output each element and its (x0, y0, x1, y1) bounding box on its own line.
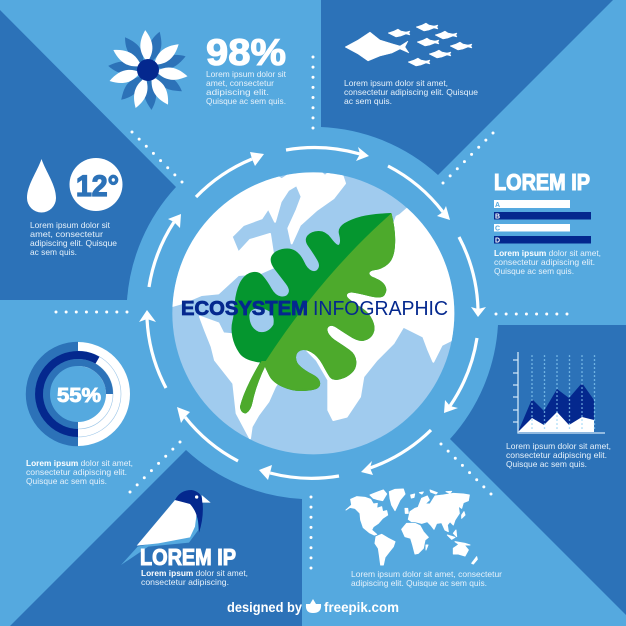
footer credit: designed by (227, 599, 302, 615)
text block: donut: Quisque ac sem quis. (26, 476, 107, 486)
text block: water (30, 220, 117, 257)
land: south america (199, 316, 278, 440)
text block: donut (26, 458, 133, 486)
text block: water: ac sem quis. (30, 247, 77, 257)
leaf (232, 214, 394, 412)
text block: area chart: Quisque ac sem quis. (506, 459, 587, 469)
text block: fish: ac sem quis. (344, 96, 392, 106)
panel: bird, bottom (10, 450, 302, 626)
stat: 98%: 98% (206, 32, 286, 73)
text block: water: amet, consectetur (30, 229, 103, 239)
land: east (303, 203, 460, 420)
bar chart (494, 200, 591, 244)
text block: flower: adipiscing elit. (206, 87, 269, 97)
text block: bars (494, 248, 601, 276)
circular arrows (139, 147, 486, 480)
land: north west (172, 172, 346, 307)
title: ECOSYSTEM (181, 298, 308, 320)
panel: area chart, right (450, 325, 626, 615)
bar chart: C (495, 226, 500, 232)
text block: bird: Lorem ipsum dolor sit amet, (141, 568, 248, 578)
icon: bird (121, 490, 211, 565)
bar chart: D (495, 238, 500, 244)
donut chart: 55% (57, 385, 101, 407)
text block: bars: Lorem ipsum dolor sit amet, (494, 248, 601, 258)
heading: lorem ip, bottom: LOREM IP (140, 544, 236, 570)
text block: flower: amet, consectetur (206, 78, 274, 88)
footer credit (227, 599, 399, 615)
bar chart: A (495, 202, 500, 209)
globe (160, 160, 460, 454)
icon: school of fish (345, 23, 472, 66)
area chart (513, 352, 605, 433)
text block: world map (351, 569, 502, 588)
heading: lorem ip, right: LOREM IP (494, 169, 590, 195)
panel: fish, top (321, 0, 613, 175)
panel: water, top left (0, 10, 176, 300)
text block: fish (344, 78, 478, 106)
title (181, 298, 448, 320)
title: INFOGRAPHIC (313, 298, 448, 320)
text block: area chart: Lorem ipsum dolor sit amet, (506, 441, 611, 451)
text block: water: Lorem ipsum dolor sit (30, 220, 111, 230)
text block: world map: Lorem ipsum dolor sit amet, consectetur (351, 569, 502, 579)
text block: bars: consectetur adipiscing elit. (494, 257, 595, 267)
icon: world map (346, 489, 477, 565)
text block: area chart: consectetur adipiscing elit. (506, 450, 607, 460)
text block: donut: Lorem ipsum dolor sit amet, (26, 458, 133, 468)
footer credit: freepik.com (324, 599, 399, 615)
icon: water drop (27, 159, 56, 212)
donut chart (31, 342, 130, 446)
stat: 12 degrees: 12° (76, 170, 119, 203)
text block: flower: Quisque ac sem quis. (206, 96, 286, 106)
text block: bars: Quisque ac sem quis. (494, 266, 574, 276)
bar chart: B (495, 214, 500, 220)
text block: bird (141, 568, 248, 587)
text block: fish: consectetur adipiscing elit. Quisque (344, 87, 478, 97)
stat: 12 degrees (70, 158, 122, 211)
text block: flower: Lorem ipsum dolor sit (206, 69, 287, 79)
text block: area chart (506, 441, 611, 469)
text block: water: adipiscing elit. Quisque (30, 238, 117, 248)
text block: donut: consectetur adipiscing elit. (26, 467, 127, 477)
text block: fish: Lorem ipsum dolor sit amet, (344, 78, 448, 88)
text block: world map: adipiscing elit. Quisque ac sem quis. (351, 578, 487, 588)
dotted separators (56, 57, 567, 568)
icon: flower (108, 30, 188, 110)
text block: bird: consectetur adipiscing. (141, 577, 229, 587)
text block: flower (206, 69, 287, 106)
